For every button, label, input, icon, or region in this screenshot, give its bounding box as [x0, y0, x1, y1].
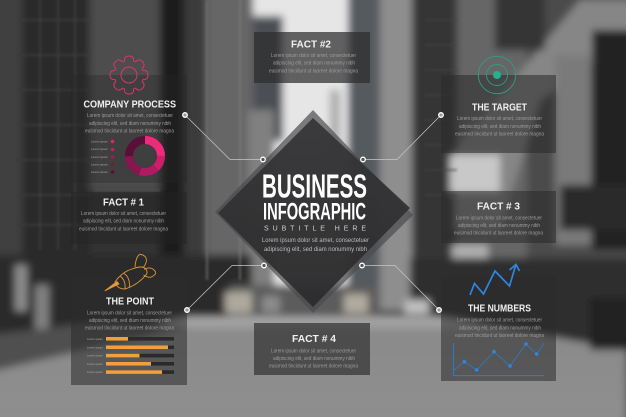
bar chart	[87, 337, 174, 374]
bar chart: Lorem ipsum	[87, 337, 103, 341]
icon: gear	[110, 56, 148, 94]
panel: The Target: euismod tincidunt ut laoreet dolore magna	[455, 132, 544, 138]
title: BUSINESS	[262, 168, 367, 204]
legend: Lorem ipsum	[91, 162, 108, 166]
title	[262, 168, 367, 226]
text block: company process: euismod tincidunt ut laoreet dolore magna	[85, 128, 174, 134]
description: adipiscing elit, sed diam nonummy nibh	[264, 247, 367, 253]
connector: bottom left	[185, 263, 266, 312]
connector: top left	[183, 113, 265, 162]
panel: The Point	[71, 254, 187, 385]
panel: Fact 2	[254, 32, 370, 83]
line chart	[453, 342, 544, 377]
panel: Fact 4: FACT # 4	[292, 334, 336, 345]
panel: The Point: Lorem ipsum dolor sit amet, consectetuer	[87, 310, 172, 316]
panel: Fact 4: Lorem ipsum dolor sit amet, consectetuer	[271, 348, 356, 354]
panel: The Point: THE POINT	[106, 296, 154, 308]
donut chart	[129, 140, 161, 172]
legend: Lorem ipsum	[91, 170, 108, 174]
bar chart: Lorem ipsum	[87, 370, 103, 374]
title: INFOGRAPHIC	[263, 198, 366, 226]
panel: The Numbers: adipiscing elit, sed diam nonummy nibh	[459, 326, 541, 332]
panel: Fact 1: euismod tincidunt ut laoreet dolore magna	[79, 226, 168, 232]
panel: Fact 2: adipiscing elit, sed diam nonummy nibh	[273, 60, 355, 66]
legend: Lorem ipsum	[91, 147, 108, 151]
panel: Fact 2: euismod tincidunt ut laoreet dolore magna	[269, 68, 358, 74]
panel: The Numbers	[441, 264, 556, 381]
central diamond	[215, 110, 413, 313]
icon: target	[478, 56, 516, 94]
panel: The Target	[441, 56, 556, 153]
text block: company process	[85, 113, 174, 134]
panel: The Target: THE TARGET	[472, 102, 527, 114]
text block: company process: Lorem ipsum dolor sit amet, consectetuer	[87, 113, 173, 119]
panel: Fact 3: Lorem ipsum dolor sit amet, consectetuer	[456, 216, 542, 222]
panel: The Target: Lorem ipsum dolor sit amet, consectetuer	[457, 116, 542, 122]
icon: rising arrow	[470, 264, 520, 295]
panel: Fact 4: adipiscing elit, sed diam nonummy nibh	[273, 356, 355, 362]
panel: The Point: euismod tincidunt ut laoreet dolore magna	[85, 326, 174, 332]
subtitle: SUBTITLE HERE	[264, 226, 366, 232]
panel: Fact 3	[441, 191, 556, 243]
panel: Fact 1: adipiscing elit, sed diam nonummy nibh	[83, 218, 164, 224]
panel: Fact 2: Lorem ipsum dolor sit amet, consectetuer	[271, 53, 356, 59]
panel: Fact 4	[254, 323, 370, 375]
panel: The Target: adipiscing elit, sed diam nonummy nibh	[459, 124, 541, 130]
icon: dart	[105, 254, 156, 291]
panel: Fact 2: FACT #2	[291, 40, 331, 50]
connector: bottom right	[360, 263, 441, 312]
bar chart: Lorem ipsum	[87, 354, 103, 358]
panel: Fact 4: euismod tincidunt ut laoreet dolore magna	[269, 364, 358, 370]
bar chart: Lorem ipsum	[87, 362, 103, 366]
panel: Company Process	[71, 56, 187, 183]
legend: Lorem ipsum	[91, 155, 108, 159]
description	[262, 238, 369, 253]
panel: The Numbers: euismod tincidunt ut laoreet dolore magna	[455, 333, 544, 339]
connector: top right	[361, 113, 443, 162]
description: Lorem ipsum dolor sit amet, consectetuer	[262, 238, 369, 244]
text block: company process: adipiscing elit, sed diam nonummy nibh	[89, 121, 171, 127]
panel: The Point: adipiscing elit, sed diam nonummy nibh	[89, 318, 171, 324]
panel: Fact 1: Lorem ipsum dolor sit amet, consectetuer	[81, 211, 166, 217]
panel: Fact 1: FACT # 1	[103, 198, 144, 208]
panel: Fact 1	[71, 192, 187, 244]
panel: Fact 3: FACT # 3	[477, 202, 520, 212]
heading: company process: COMPANY PROCESS	[84, 100, 176, 110]
bar chart: Lorem ipsum	[87, 345, 103, 349]
panel: The Numbers: Lorem ipsum dolor sit amet, consectetuer	[457, 318, 542, 324]
panel: The Numbers: THE NUMBERS	[468, 304, 531, 314]
legend	[91, 140, 114, 174]
legend: Lorem ipsum	[91, 140, 108, 144]
panel: Fact 3: euismod tincidunt ut laoreet dolore magna	[454, 230, 543, 236]
panel: Fact 3: adipiscing elit, sed diam nonummy nibh	[458, 223, 540, 229]
